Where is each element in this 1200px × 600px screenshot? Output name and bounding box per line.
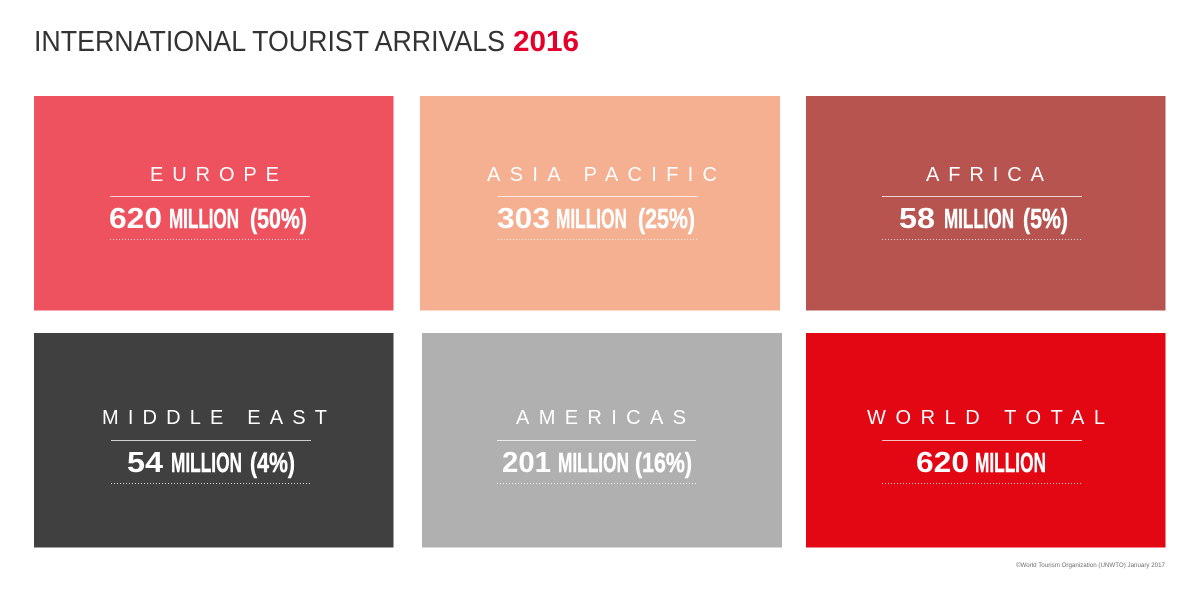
panel: Americas: AMERICAS xyxy=(516,407,686,429)
panel: Americas: (16%) xyxy=(635,447,692,478)
panel: Middle East xyxy=(34,333,394,548)
panel: Americas: MILLION xyxy=(558,447,629,478)
panel: World Total: 620 xyxy=(916,447,969,479)
panel: Africa xyxy=(806,96,1166,310)
panel: Middle East: MIDDLE EAST xyxy=(102,407,327,429)
panel: Middle East: MILLION xyxy=(171,447,242,478)
panel: Asia Pacific xyxy=(420,96,780,310)
panel: Asia Pacific: MILLION xyxy=(556,203,627,234)
panel: Europe xyxy=(34,96,394,310)
panel: Africa: 58 xyxy=(899,203,935,235)
panel: Americas xyxy=(422,333,782,548)
title: 2016 xyxy=(513,26,579,58)
panel: Africa: (5%) xyxy=(1023,203,1068,234)
panel: Americas: 201 xyxy=(502,447,551,479)
panel: Africa: AFRICA xyxy=(926,164,1045,186)
panel: Middle East: (4%) xyxy=(250,447,295,478)
panel: Europe: MILLION xyxy=(169,203,239,234)
panel: Europe: (50%) xyxy=(250,203,307,234)
panel: Asia Pacific: 303 xyxy=(497,203,550,235)
panel: World Total xyxy=(806,333,1166,548)
source credit: ©World Tourism Organization (UNWTO) January 2017 xyxy=(1016,561,1165,569)
panel: Europe: 620 xyxy=(109,203,162,235)
panel: World Total: WORLD TOTAL xyxy=(867,407,1105,429)
panel: Middle East: 54 xyxy=(127,447,163,479)
title: INTERNATIONAL TOURIST ARRIVALS xyxy=(34,26,505,58)
panel: World Total: MILLION xyxy=(975,447,1046,478)
panel: Africa: MILLION xyxy=(944,203,1014,234)
panel: Asia Pacific: ASIA PACIFIC xyxy=(487,164,717,186)
panel: Europe: EUROPE xyxy=(150,164,279,186)
panel: Asia Pacific: (25%) xyxy=(638,203,695,234)
